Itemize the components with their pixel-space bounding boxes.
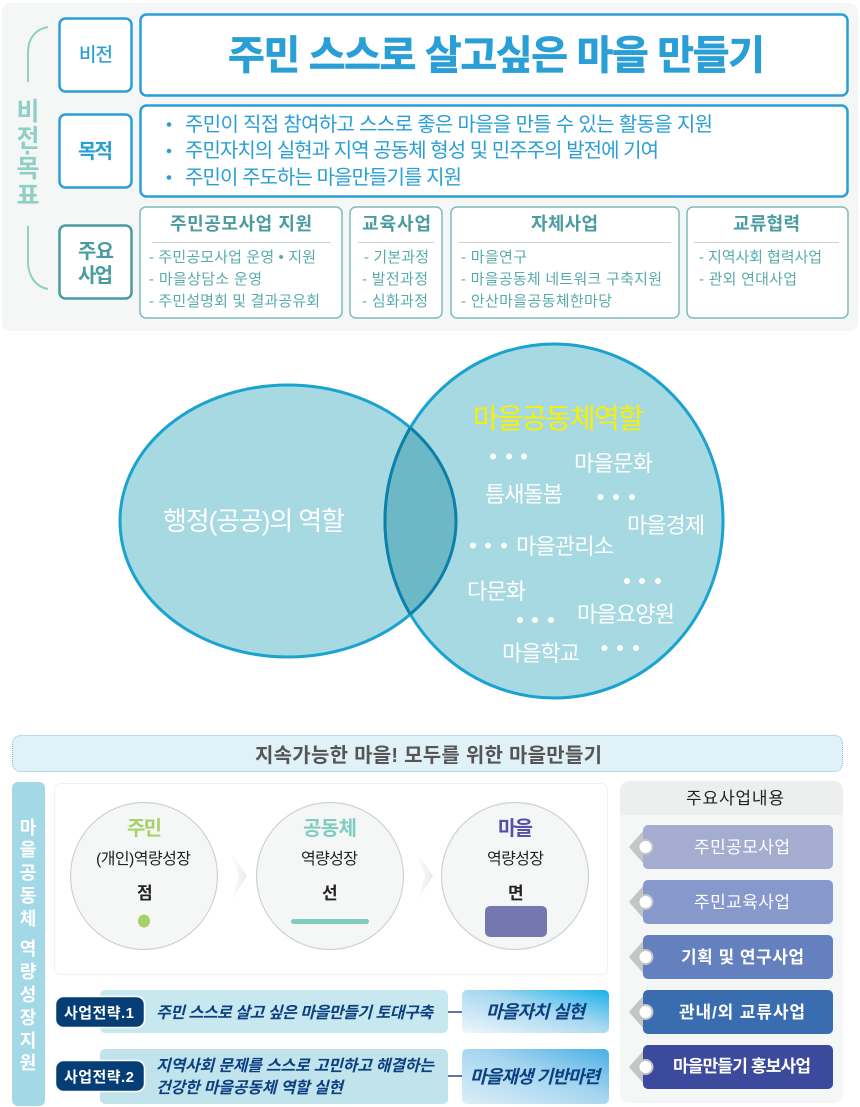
text block: purpose list (140, 106, 848, 196)
strategy row 1 (56, 990, 609, 1033)
side label: vision and goals: 표 (16, 182, 40, 210)
venn circle: public role: 행정(공공)의 역할 (163, 506, 345, 536)
venn overlap outline (384, 426, 458, 616)
text block: purpose list: 주민자치의 실현과 지역 공동체 형성 및 민주주의 발전에 기여 (185, 139, 659, 162)
venn circle: community role: 마을문화 (574, 451, 653, 476)
label box: vision (60, 18, 132, 92)
card: own projects: 자체사업 (531, 214, 598, 234)
side label: community capacity growth support: 역 (20, 939, 36, 959)
side label: community capacity growth support: 장 (20, 1008, 37, 1028)
button: planning and research project: 기획 및 연구사업 (681, 948, 804, 967)
stage: resident point (70, 802, 218, 950)
label box: purpose: 목적 (78, 140, 113, 163)
card: resident contest projects: 주민공모사업 지원 (170, 214, 312, 234)
side label: community capacity growth support: 을 (20, 840, 36, 860)
venn circle: community role (385, 344, 723, 698)
panel: vision and goals (2, 3, 858, 331)
venn circle: community role: 마을요양원 (577, 602, 675, 627)
card: resident contest projects: - 마을상담소 운영 (149, 271, 262, 288)
card: resident contest projects: - 주민설명회 및 결과공유회 (149, 293, 320, 310)
venn circle: community role: 마을경제 (627, 513, 705, 538)
venn circle: community role: 마을관리소 (516, 534, 614, 559)
stage: village plane (442, 802, 588, 950)
text block: purpose list: 주민이 주도하는 마을만들기를 지원 (185, 166, 462, 189)
strategy row 1: 마을자치 실현 (486, 1002, 587, 1022)
side label: community capacity growth support: 원 (20, 1053, 36, 1073)
stage: resident point: 주민 (127, 817, 162, 840)
button: resident education project: 주민교육사업 (694, 893, 790, 912)
side label: community capacity growth support: 성 (20, 985, 36, 1005)
side label: community capacity growth support: 체 (20, 909, 36, 929)
stage: community line: 선 (322, 884, 338, 903)
venn circle: public role (120, 385, 456, 657)
panel: capacity growth stages (54, 784, 608, 974)
card: education projects (350, 207, 442, 318)
label box: main projects: 사업 (78, 264, 113, 287)
card: own projects: - 마을공동체 네트워크 구축지원 (461, 271, 662, 288)
card: own projects: - 안산마을공동체한마당 (461, 293, 612, 310)
strategy row 2: 사업전략.2 (64, 1069, 134, 1086)
arrow: stage 1 to 2 (230, 851, 247, 903)
stage: village plane: 마을 (498, 817, 533, 840)
side label: community capacity growth support: 동 (20, 886, 36, 906)
label box: main projects (60, 226, 132, 298)
button: exchange project (629, 990, 833, 1034)
card: exchange cooperation: - 지역사회 협력사업 (699, 249, 822, 266)
heading: sustainable village banner (12, 736, 842, 772)
side label: community capacity growth support: 공 (20, 863, 36, 883)
card: education projects: 교육사업 (362, 214, 431, 234)
heading: vision statement (140, 14, 848, 96)
venn overlap (386, 430, 454, 612)
side label: vision and goals (16, 27, 48, 289)
stage: community line: 공동체 (303, 817, 357, 840)
arrow: stage 2 to 3 (416, 851, 433, 903)
side label: community capacity growth support (12, 782, 45, 1106)
card: own projects: - 마을연구 (461, 249, 527, 266)
stage: village plane: 역량성장 (487, 850, 544, 868)
stage: community line (256, 802, 404, 950)
heading: vision statement: 주민 스스로 살고싶은 마을 만들기 (228, 34, 765, 78)
card: resident contest projects: - 주민공모사업 운영 • 지원 (149, 249, 316, 266)
card: education projects: - 심화과정 (362, 293, 428, 310)
chart: venn diagram of roles (120, 344, 723, 698)
card: education projects: - 기본과정 (364, 249, 429, 266)
stage: village plane: 면 (508, 884, 524, 903)
label box: vision: 비전 (79, 44, 113, 66)
button: promotion project: 마을만들기 홍보사업 (673, 1057, 811, 1076)
strategy row 1: 사업전략.1 (64, 1005, 134, 1022)
card: exchange cooperation: 교류협력 (733, 214, 800, 234)
button: promotion project (629, 1045, 833, 1089)
strategy row 2: 건강한 마을공동체 역할 실현 (156, 1079, 345, 1097)
side label: vision and goals: · (24, 139, 32, 167)
side label: vision and goals: 목 (16, 155, 40, 183)
strategy row 2 (56, 1049, 609, 1104)
button: resident contest project (629, 825, 833, 869)
card: education projects: - 발전과정 (362, 271, 428, 288)
side label: vision and goals: 비 (16, 98, 40, 126)
side label: community capacity growth support: 지 (20, 1031, 36, 1051)
side label: community capacity growth support: 량 (20, 962, 37, 982)
button: exchange project: 관내/외 교류사업 (679, 1003, 805, 1022)
button: planning and research project (629, 935, 833, 979)
strategy row 2: 마을재생 기반마련 (470, 1067, 602, 1087)
heading: main project contents: 주요사업내용 (686, 789, 784, 808)
venn circle: community role: 마을학교 (502, 641, 580, 666)
strategy row 2: 지역사회 문제를 스스로 고민하고 해결하는 (156, 1057, 435, 1075)
panel: main project contents (620, 781, 843, 1103)
card: resident contest projects (140, 207, 342, 318)
button: resident contest project: 주민공모사업 (694, 838, 790, 857)
side label: vision and goals: 전 (16, 125, 40, 153)
venn circle: community role: 다문화 (467, 579, 526, 604)
venn circle: community role: 마을공동체역할 (473, 403, 644, 434)
venn circle: community role: 틈새돌봄 (485, 482, 563, 507)
card: exchange cooperation: - 관외 연대사업 (699, 271, 797, 288)
stage: community line: 역량성장 (301, 850, 358, 868)
heading: sustainable village banner: 지속가능한 마을! 모두를 위한 마을만들기 (255, 744, 602, 767)
text block: purpose list: 주민이 직접 참여하고 스스로 좋은 마을을 만들 수 있는 활동을 지원 (185, 113, 713, 136)
stage: resident point: 점 (137, 884, 153, 903)
strategy row 1: 주민 스스로 살고 싶은 마을만들기 토대구축 (156, 1004, 434, 1022)
side label: community capacity growth support: 마 (20, 818, 37, 838)
card: own projects (451, 207, 679, 318)
button: resident education project (629, 880, 833, 924)
label box: purpose (60, 114, 132, 188)
stage: resident point: (개인)역량성장 (96, 850, 191, 868)
label box: main projects: 주요 (78, 241, 114, 263)
heading: main project contents (620, 781, 843, 815)
card: exchange cooperation (687, 207, 848, 318)
